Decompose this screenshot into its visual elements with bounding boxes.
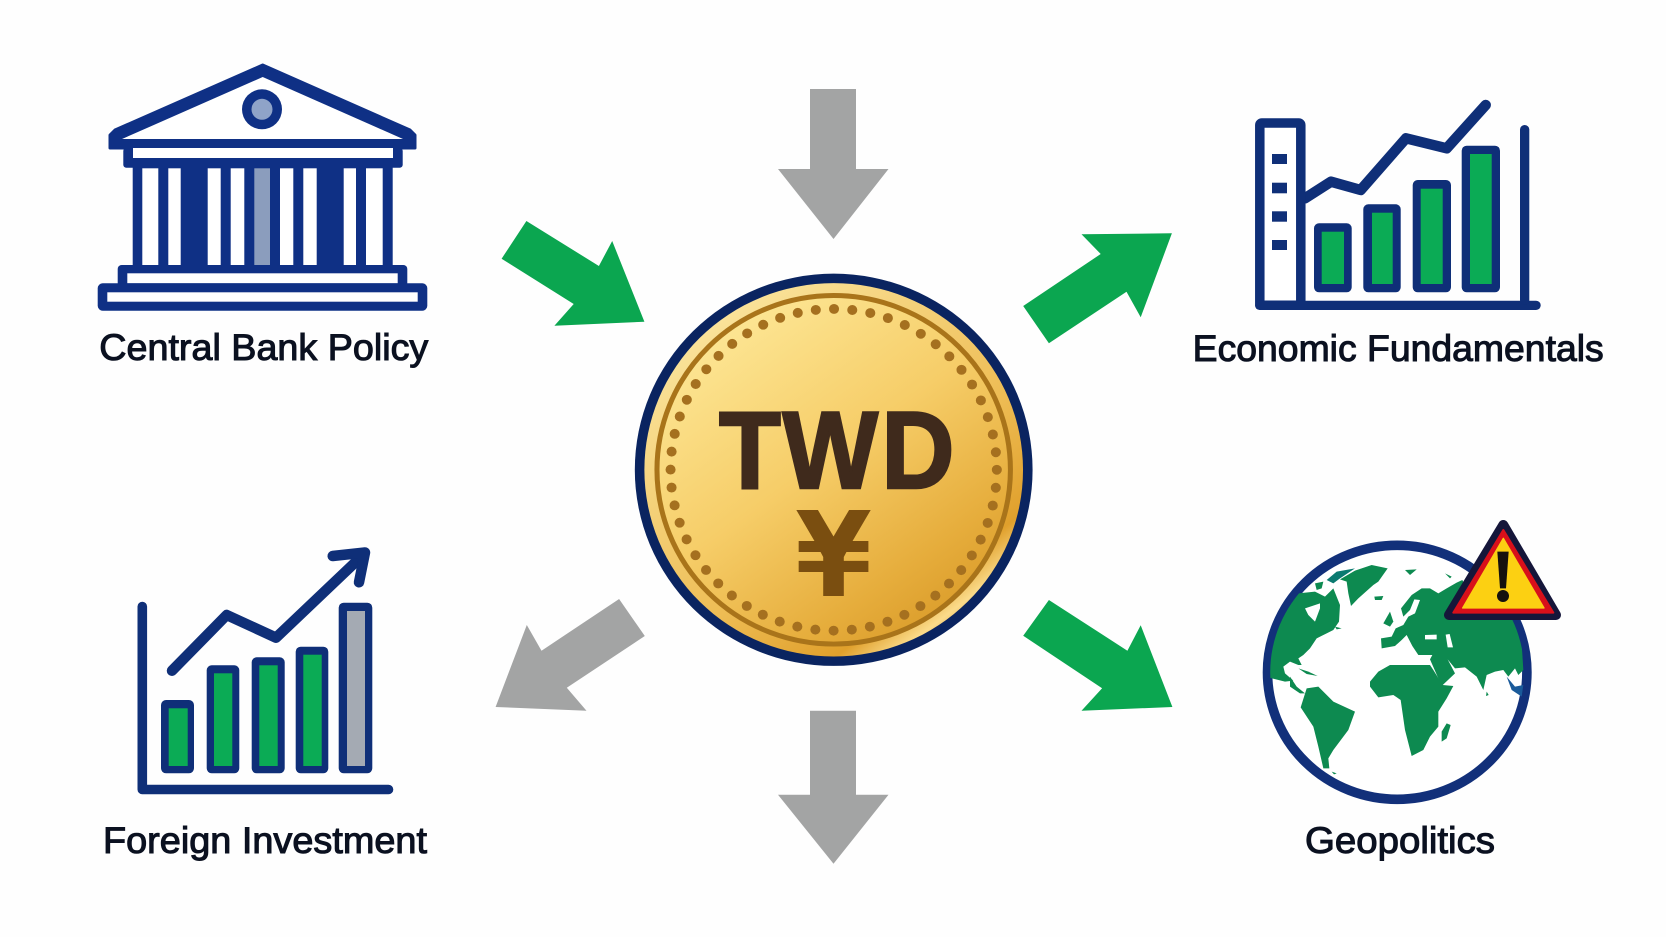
Africa and South America <box>1290 665 1489 774</box>
arrow: lower-right green out of coin <box>1023 600 1172 711</box>
icon: foreign investment chart <box>142 552 388 790</box>
label: foreign investment: Foreign Investment <box>103 820 428 861</box>
Americas and Greenland <box>1265 565 1388 682</box>
arrow: upper-right green out of coin <box>1023 233 1172 343</box>
label: economic fundamentals: Economic Fundamentals <box>1193 328 1604 369</box>
Eurasia <box>1381 569 1523 697</box>
arrow: upper-left green into coin <box>502 221 644 326</box>
globe continents <box>1265 565 1523 774</box>
icon: economic fundamentals chart <box>1255 105 1541 310</box>
warning triangle <box>1449 525 1556 615</box>
infographic canvas <box>98 64 1603 864</box>
label: central bank policy: Central Bank Policy <box>99 327 429 368</box>
arrow: lower-left grey out of coin <box>496 599 645 711</box>
coin text: TWD: TWD <box>719 389 954 512</box>
arrow: top grey down <box>778 89 888 239</box>
icon: globe with warning triangle <box>1265 525 1556 799</box>
icon: central bank building <box>98 65 427 311</box>
central TWD coin <box>635 274 1033 666</box>
arrow: bottom grey down <box>778 711 888 864</box>
label: geopolitics: Geopolitics <box>1305 820 1495 861</box>
coin symbol: yen: ¥ <box>795 486 872 624</box>
